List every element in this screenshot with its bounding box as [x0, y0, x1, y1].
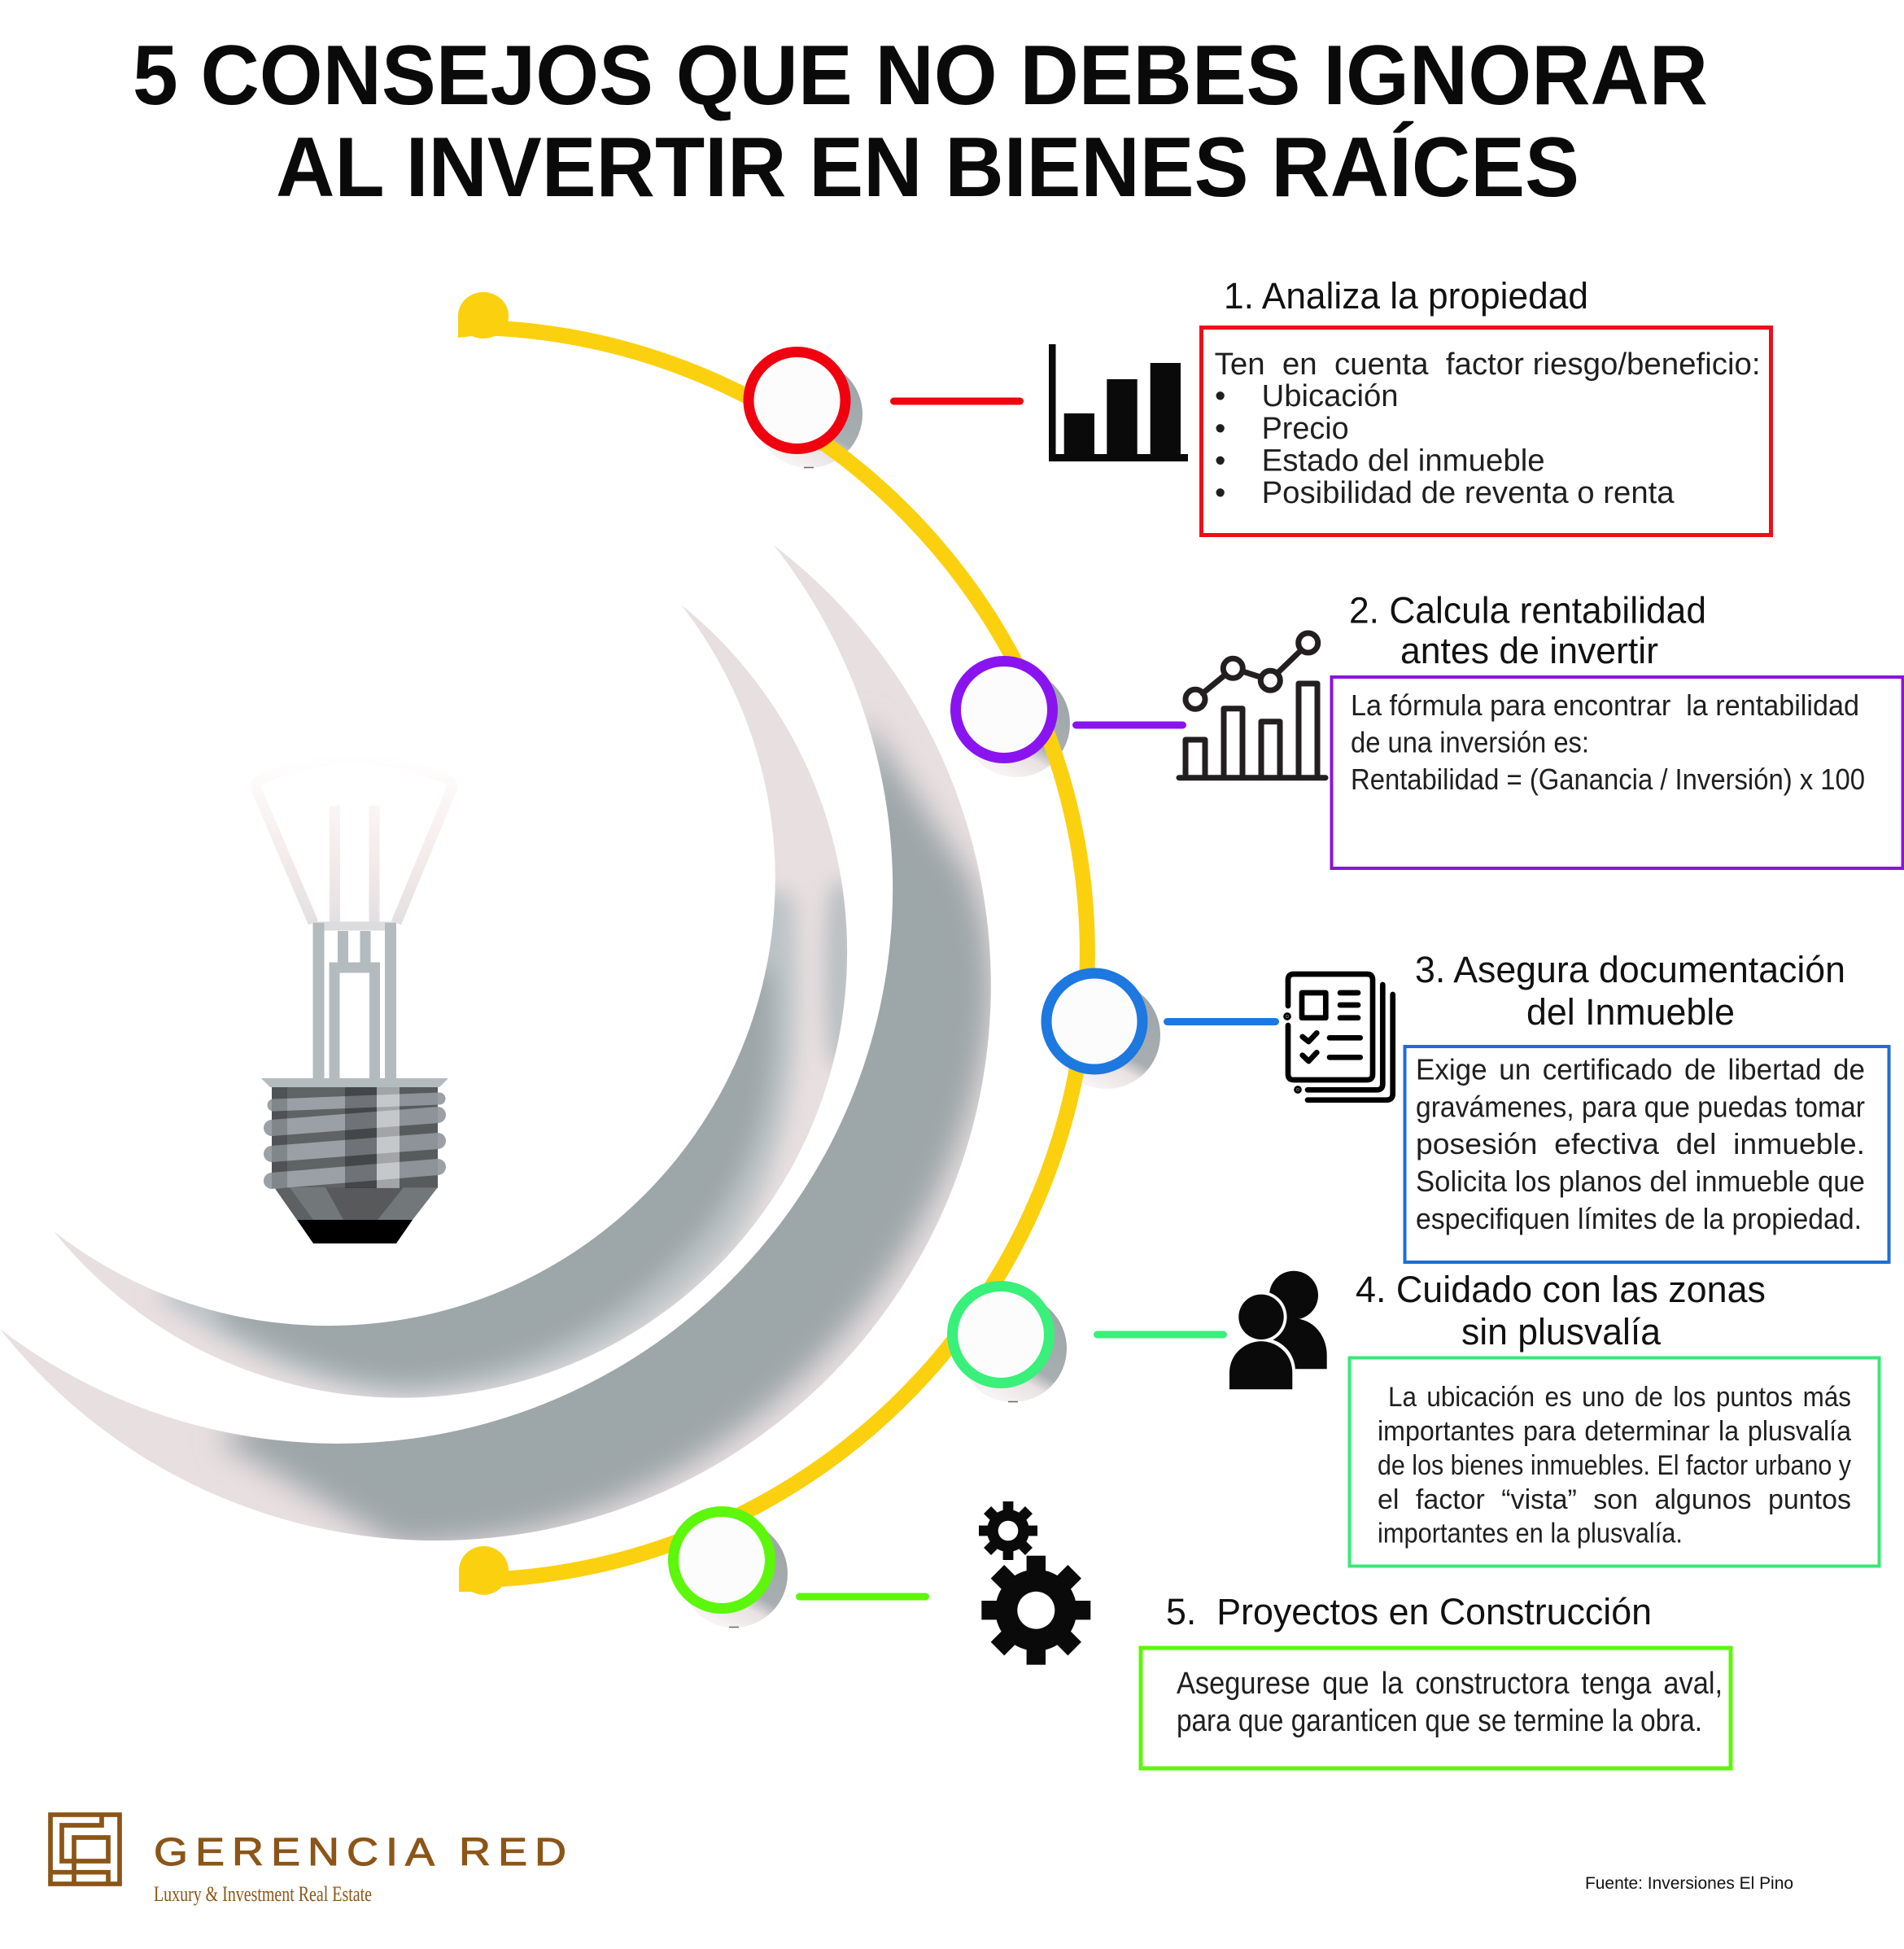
body text 1: Precio [1262, 412, 1349, 446]
body text 3 [1416, 1053, 1865, 1235]
logo mark [50, 1815, 120, 1884]
top arc end cap [458, 292, 509, 339]
body text 4: de los bienes inmuebles. El factor urbano y [1378, 1450, 1851, 1481]
body text 3: posesión efectiva del inmueble. [1416, 1127, 1865, 1160]
body text 1: • [1215, 444, 1225, 479]
icon: people [1226, 1271, 1327, 1393]
body text 1: Posibilidad de reventa o renta [1262, 476, 1675, 510]
body text 4 [1378, 1382, 1851, 1549]
panel: tip 3 [1404, 949, 1889, 1262]
body text 1 [1215, 347, 1761, 510]
heading 2: 2. Calcula rentabilidad [1349, 589, 1706, 631]
body text 4: el factor “vista” son algunos puntos [1378, 1484, 1851, 1515]
body text 1: Estado del inmueble [1262, 444, 1545, 479]
heading 4: 4. Cuidado con las zonas [1356, 1269, 1766, 1310]
body text 4: importantes para determinar la plusvalía [1378, 1416, 1851, 1447]
title [133, 28, 1708, 215]
connector 3 [1164, 1018, 1279, 1025]
source note: Fuente: Inversiones El Pino [1585, 1874, 1793, 1893]
body text 2: de una inversión es: [1351, 726, 1589, 758]
heading 5: 5. Proyectos en Construcción [1166, 1591, 1652, 1632]
logo tagline: Luxury & Investment Real Estate [154, 1882, 372, 1906]
light bulb [255, 758, 452, 1243]
logo name: GERENCIA RED [154, 1831, 574, 1874]
body text 4: importantes en la plusvalía. [1378, 1519, 1683, 1549]
box 4 [1349, 1357, 1880, 1566]
step 4 node [952, 1286, 1050, 1383]
bottom arc end cap [459, 1546, 509, 1595]
heading 3: 3. Asegura documentación [1415, 949, 1845, 990]
body text 4: La ubicación es uno de los puntos más [1388, 1382, 1851, 1413]
title: 5 CONSEJOS QUE NO DEBES IGNORAR [133, 28, 1708, 123]
icon: document stack [1286, 974, 1393, 1100]
box 1 [1201, 327, 1771, 535]
body text 1: Ubicación [1262, 379, 1399, 413]
body text 3: Exige un certificado de libertad de [1416, 1053, 1865, 1086]
connector 4 [1094, 1331, 1227, 1338]
heading 1: 1. Analiza la propiedad [1224, 275, 1588, 317]
body text 2: La fórmula para encontrar la rentabilidad [1351, 688, 1859, 722]
panel: tip 5 [1141, 1591, 1731, 1768]
heading 3: del Inmueble [1526, 991, 1735, 1033]
body text 3: Solicita los planos del inmueble que [1416, 1165, 1865, 1198]
body text 5 [1177, 1667, 1723, 1738]
step 5 node [674, 1512, 770, 1608]
body text 3: gravámenes, para que puedas tomar [1416, 1090, 1865, 1123]
heading 2: antes de invertir [1400, 630, 1658, 671]
body text 1: Ten en cuenta factor riesgo/beneficio: [1215, 347, 1761, 382]
title: AL INVERTIR EN BIENES RAÍCES [276, 120, 1579, 215]
body text 1: • [1215, 412, 1225, 446]
box 5 [1141, 1648, 1731, 1768]
icon: large gear [981, 1556, 1090, 1665]
body text 2: Rentabilidad = (Ganancia / Inversión) x 100 [1351, 763, 1865, 796]
node drop shadows [680, 361, 1160, 1628]
panel: tip 1 [1201, 275, 1771, 535]
panel: tip 2 [1331, 589, 1902, 868]
body text 1: • [1215, 476, 1225, 510]
heading 3 [1415, 949, 1845, 1033]
step 3 node [1046, 973, 1142, 1069]
icon: line and bar chart [1179, 633, 1325, 778]
body text 1: • [1215, 379, 1225, 413]
body text 5: para que garanticen que se termine la obra. [1177, 1704, 1702, 1738]
body text 2 [1351, 688, 1865, 796]
heading 2 [1349, 589, 1706, 671]
yellow arc timeline [458, 292, 1087, 1580]
connector 2 [1072, 721, 1186, 729]
heading 4 [1356, 1269, 1766, 1353]
body text 3: especifiquen límites de la propiedad. [1416, 1202, 1862, 1235]
logo [50, 1815, 574, 1906]
icon: bar chart [1049, 344, 1188, 461]
step 2 node [955, 661, 1053, 758]
outer crescent [0, 545, 991, 1546]
body text 5: Asegurese que la constructora tenga aval, [1177, 1667, 1723, 1701]
box 3 [1404, 1047, 1889, 1262]
heading 4: sin plusvalía [1461, 1311, 1662, 1353]
connector 1 [890, 397, 1024, 405]
icon: small gear [979, 1501, 1037, 1560]
box 2 [1331, 677, 1902, 868]
inner crescent [54, 605, 854, 1398]
connector 5 [796, 1593, 929, 1600]
panel: tip 4 [1349, 1269, 1880, 1566]
step 1 node [749, 352, 845, 449]
